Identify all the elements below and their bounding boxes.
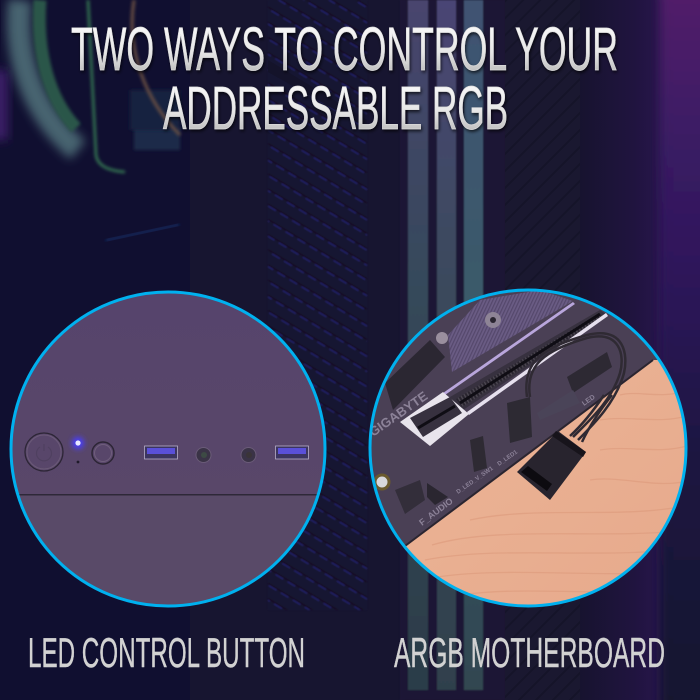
ARGB plug connector [517,431,586,500]
capacitor [375,475,389,489]
centre vent panel [268,0,367,610]
RAM and light bars [400,0,505,700]
icon: audio jack right [241,448,256,462]
icon: LED control button [92,442,114,464]
mounting screw [485,312,501,328]
board silkscreen labels: D_LED1 [497,449,520,468]
board edge shadow [405,360,653,546]
board silkscreen labels: LED [581,394,597,408]
ARGB cable [526,333,625,442]
main PCIe slot [443,302,608,415]
board silkscreen labels: GIGABYTE [366,388,431,439]
icon: USB port right [276,446,308,459]
right purple glow [580,0,700,700]
board silkscreen labels: F_AUDIO [417,496,455,528]
icon: audio jack left [196,448,211,462]
short PCIe slot [400,392,469,446]
icon: USB port left [144,446,178,459]
small screw [436,332,448,344]
left fan area [0,0,195,700]
right circle outline [370,290,686,606]
motherboard [372,292,658,545]
board silkscreen labels: D_LED_V_SW1 [456,465,495,496]
caption: LED control button: LED CONTROL BUTTON [28,629,305,676]
wood desk [405,360,690,610]
title [71,15,618,142]
black slots upper left [385,340,445,410]
panel: LED control button photo [10,290,326,610]
board silkscreen labels [366,388,597,528]
icon: blue LED [72,437,84,449]
left circle outline [11,292,325,606]
panel: ARGB motherboard photo [366,288,690,610]
pin headers [395,352,612,514]
icon: reset pinhole [77,461,79,463]
tower body [190,0,405,700]
right vent panel [505,0,580,700]
striped heatsink panel [448,290,573,372]
icon: power button [25,433,63,471]
